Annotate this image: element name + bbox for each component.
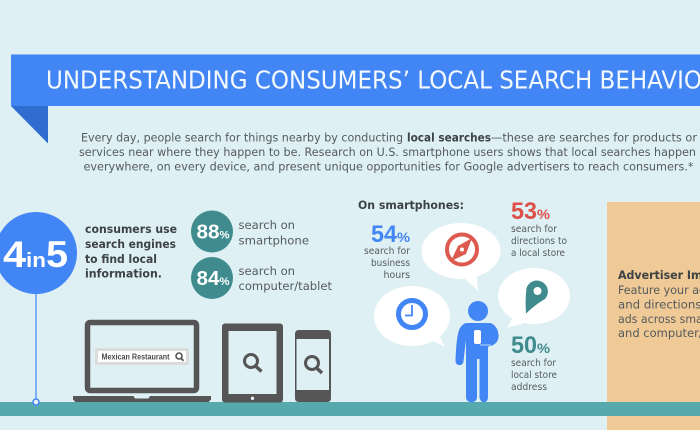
icon: phone [295, 330, 331, 402]
icon: laptop [73, 322, 211, 402]
consumers text: to find local [85, 253, 157, 266]
stat: 53% directions: search for [511, 224, 558, 235]
panel: advertiser implications [607, 202, 700, 430]
stat: 53% directions: 53 [511, 198, 537, 225]
stat: 84% computer/tablet: 84 [196, 268, 220, 290]
4 in 5 circle: in [26, 250, 46, 272]
connector line with dot [33, 290, 39, 405]
stat: 88% smartphone: 88 [196, 222, 220, 244]
heading: on smartphones: On smartphones: [358, 199, 464, 212]
stat: 54% business hours: hours [384, 270, 410, 281]
stat: 50% store address: address [511, 382, 547, 393]
title banner [11, 54, 700, 144]
consumers text: search engines [85, 238, 176, 251]
stat: 54% business hours: 54 [371, 221, 398, 248]
stat: 50% store address: search for [511, 358, 557, 369]
stat: 84% computer/tablet: search on [238, 264, 295, 278]
speech bubble: map pin [498, 268, 570, 328]
stat: 54% business hours [364, 221, 411, 281]
consumers text [85, 223, 177, 280]
intro text: —these are searches for products or [491, 130, 697, 144]
intro text: local searches [407, 130, 491, 144]
4 in 5 circle [0, 212, 77, 294]
stat: 53% directions: directions to [511, 236, 567, 247]
icon: tablet [222, 324, 283, 402]
stat: 50% store address: % [537, 340, 551, 356]
stat: 53% directions: a local store [511, 248, 565, 259]
stat: 54% business hours: business [371, 258, 410, 269]
stat: 50% store address [511, 332, 557, 393]
stat: 88% smartphone [191, 210, 309, 252]
stat: 88% smartphone: % [220, 230, 230, 242]
ground bar [0, 402, 700, 416]
stat: 50% store address: local store [511, 370, 557, 381]
stat: 53% directions [511, 198, 567, 259]
stat: 88% smartphone: smartphone [238, 234, 309, 248]
intro text [79, 130, 697, 174]
stat: 84% computer/tablet: % [220, 276, 230, 288]
stat: 53% directions: % [537, 206, 551, 222]
consumers text: consumers use [85, 223, 177, 236]
stat: 88% smartphone: search on [238, 218, 295, 232]
4 in 5 circle: 4 [3, 234, 26, 275]
stat: 84% computer/tablet [191, 257, 332, 299]
icon: laptop: Mexican Restaurant [102, 352, 170, 362]
4 in 5 circle: 5 [46, 234, 68, 275]
speech bubble: compass [422, 223, 500, 291]
icon: person holding phone [456, 301, 499, 402]
stat: 84% computer/tablet: computer/tablet [238, 279, 332, 293]
stat: 54% business hours: % [397, 229, 411, 245]
intro text: Every day, people search for things nearby by conducting [81, 130, 403, 144]
stat: 50% store address: 50 [511, 332, 537, 359]
speech bubble: clock [374, 286, 450, 347]
consumers text: information. [85, 268, 162, 280]
stat: 54% business hours: search for [364, 246, 411, 257]
